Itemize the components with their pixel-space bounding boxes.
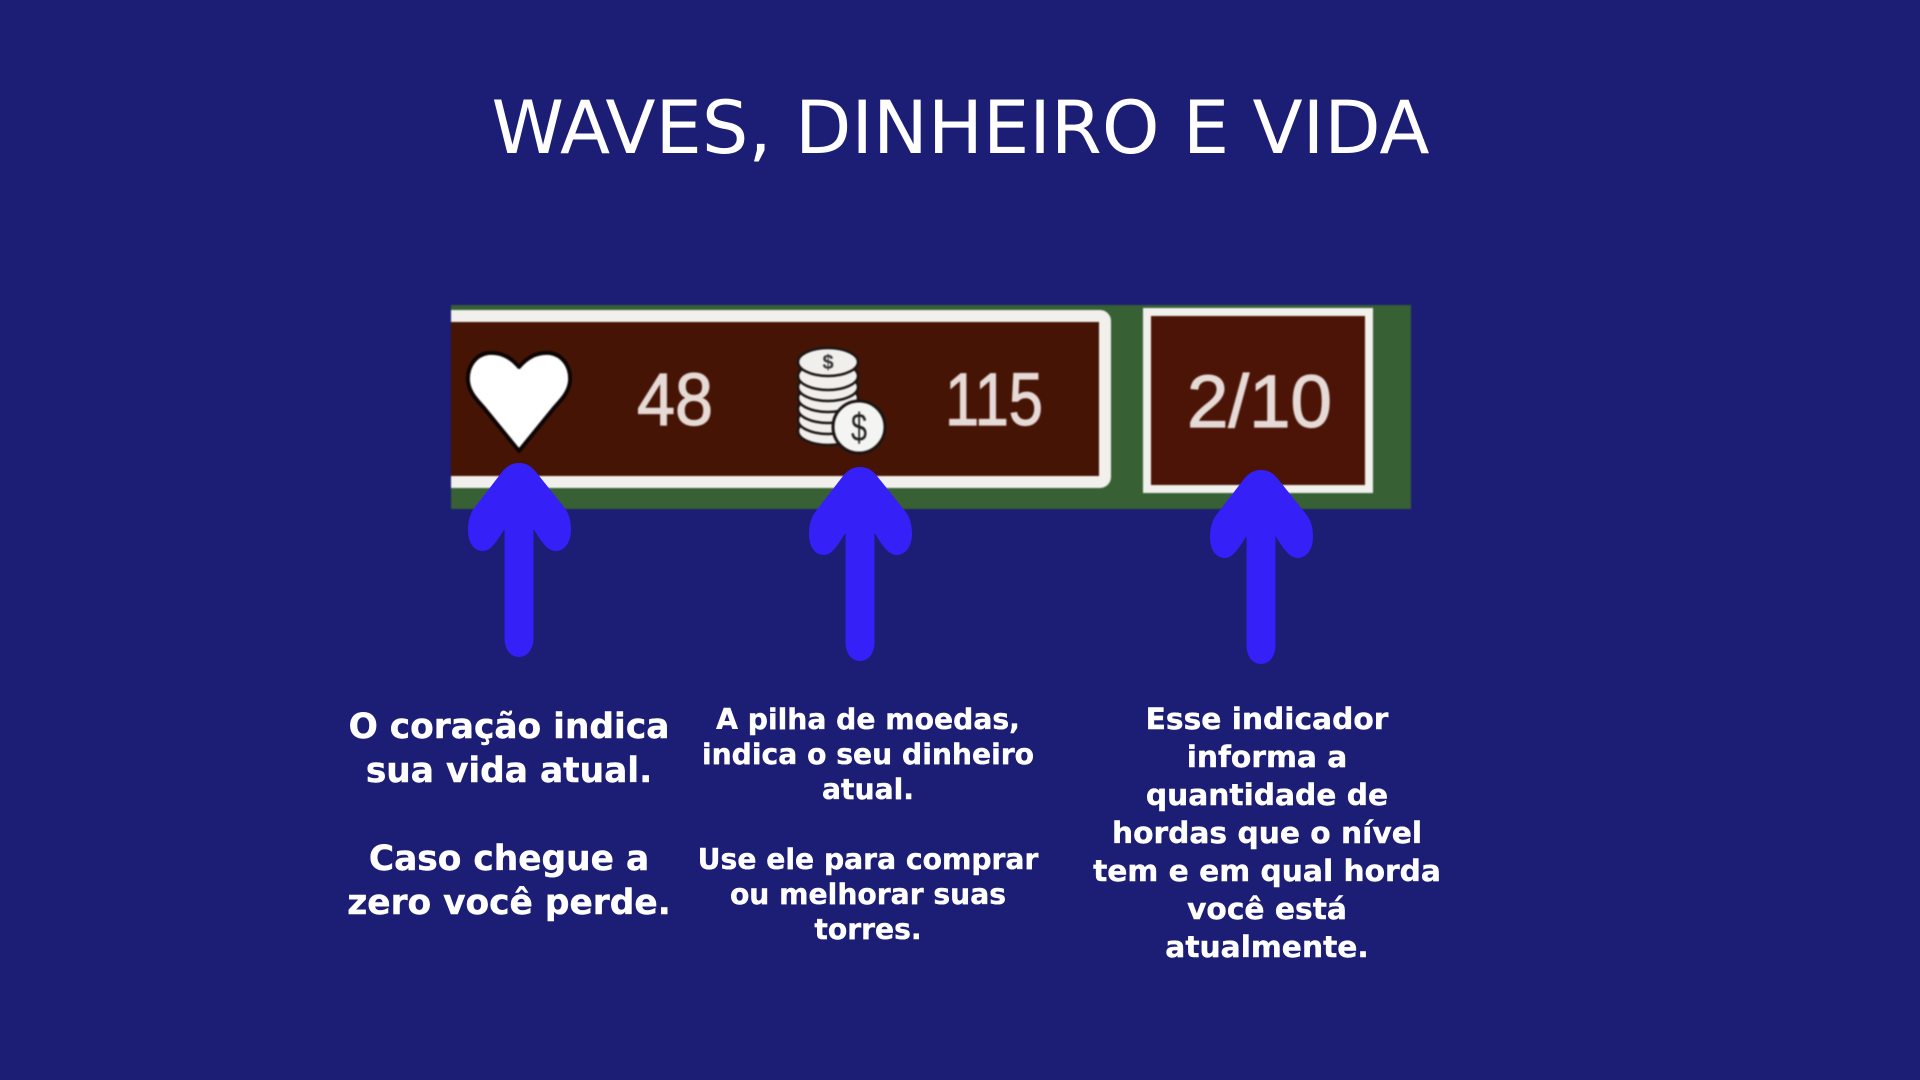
icon: heart [468, 353, 570, 451]
icon: coin stack: $ [822, 352, 834, 374]
text: life explanation: Caso chegue a [369, 839, 649, 879]
text: money explanation: A pilha de moedas, [716, 703, 1020, 736]
text: wave explanation: hordas que o nível [1112, 816, 1422, 851]
text: money explanation: indica o seu dinheiro [702, 738, 1034, 771]
arrow: to coins [809, 467, 912, 661]
text: wave explanation [1093, 702, 1441, 965]
text: wave explanation: você está [1187, 892, 1347, 927]
text: wave explanation: informa a [1187, 740, 1347, 775]
text: life explanation [347, 707, 671, 923]
life value: 48 [637, 358, 713, 441]
arrow: to heart [468, 463, 571, 657]
title: WAVES, DINHEIRO E VIDA [491, 86, 1430, 171]
text: money explanation [698, 703, 1039, 946]
panel: wave counter [1147, 312, 1369, 489]
icon: coin stack: $ [851, 406, 867, 450]
text: money explanation: Use ele para comprar [698, 843, 1038, 876]
text: wave explanation: Esse indicador [1146, 702, 1388, 737]
text: money explanation: atual. [822, 773, 914, 806]
text: wave explanation: tem e em qual horda [1093, 854, 1441, 889]
text: wave explanation: atualmente. [1165, 930, 1369, 965]
text: life explanation: sua vida atual. [366, 751, 652, 791]
text: money explanation: torres. [814, 913, 922, 946]
text: wave explanation: quantidade de [1146, 778, 1388, 813]
text: life explanation: zero você perde. [347, 883, 671, 923]
wave value: 2/10 [1187, 360, 1332, 443]
text: money explanation: ou melhorar suas [730, 878, 1006, 911]
text: life explanation: O coração indica [349, 707, 669, 747]
money value: 115 [945, 358, 1043, 441]
panel: life and money [451, 316, 1105, 482]
arrow: to wave counter [1210, 470, 1313, 664]
icon: coin stack [798, 348, 885, 453]
